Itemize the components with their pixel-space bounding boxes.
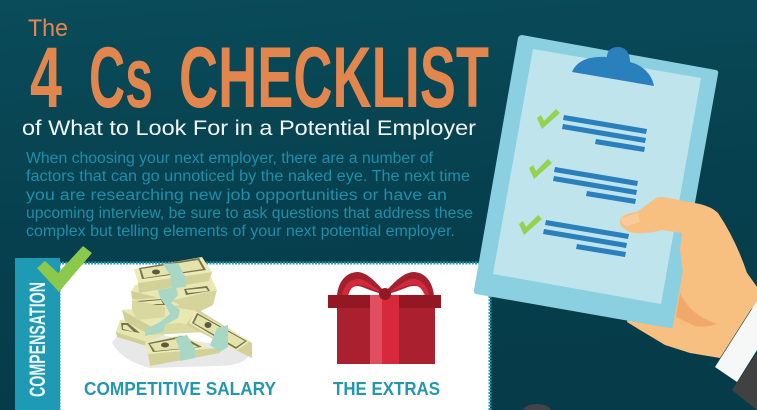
bundle: bottom left bbox=[116, 320, 165, 342]
title: CHECKLIST bbox=[179, 30, 489, 126]
intro paragraph: When choosing your next employer, there are a number of bbox=[26, 150, 434, 167]
icon: checklist item 3 bbox=[519, 215, 629, 257]
title: The bbox=[28, 15, 68, 42]
torn band bbox=[145, 287, 180, 336]
ground shadow bbox=[112, 331, 250, 368]
icon: red gift box bbox=[328, 272, 441, 364]
label: the extras: THE EXTRAS bbox=[333, 378, 440, 399]
compensation side tab: COMPENSATION bbox=[25, 282, 50, 397]
jacket sleeve bbox=[732, 353, 757, 410]
intro paragraph: complex but telling elements of your next potential employer. bbox=[26, 223, 455, 240]
icon: checklist item 1 bbox=[537, 109, 647, 152]
white panel with dotted border bbox=[59, 263, 490, 410]
partial dark icon at bottom edge bbox=[523, 404, 551, 410]
icon: stacks of money bbox=[112, 257, 252, 368]
intro paragraph: upcoming interview, be sure to ask questions that address these bbox=[26, 205, 473, 222]
compensation side tab bbox=[15, 258, 60, 410]
intro paragraph: you are researching new job opportunities or have an bbox=[26, 187, 447, 204]
illustration: hand holding clipboard bbox=[474, 35, 757, 410]
bundle: front bbox=[145, 335, 218, 355]
bundle: third bbox=[132, 297, 180, 308]
title bbox=[22, 15, 489, 140]
hand behind clipboard bbox=[627, 230, 757, 358]
icon: checklist item 2 bbox=[529, 159, 638, 204]
intro paragraph bbox=[26, 150, 473, 240]
icon: green check mark bbox=[37, 246, 92, 292]
title: of What to Look For in a Potential Employer bbox=[22, 117, 476, 140]
clipboard board bbox=[474, 35, 718, 328]
bundle: mid right fill bbox=[165, 306, 198, 325]
thumb nail bbox=[621, 213, 640, 226]
bundle: top bbox=[134, 257, 212, 283]
intro paragraph: factors that can go unnoticed by the naked eye. The next time bbox=[26, 168, 470, 185]
title: Cs bbox=[89, 30, 153, 126]
clipboard paper bbox=[493, 49, 701, 304]
shirt cuff bbox=[715, 301, 757, 382]
bundle: fourth bbox=[122, 306, 205, 326]
label: competitive salary: COMPETITIVE SALARY bbox=[84, 378, 277, 399]
title: 4 bbox=[30, 30, 62, 126]
hand thumb and fingers over clipboard bbox=[620, 197, 757, 320]
hand shadow bbox=[676, 293, 717, 327]
clipboard clip bbox=[572, 47, 654, 86]
panel: compensation bbox=[15, 246, 490, 410]
bundle: right behind bbox=[131, 275, 217, 303]
bundle: tilted right bbox=[186, 309, 252, 358]
